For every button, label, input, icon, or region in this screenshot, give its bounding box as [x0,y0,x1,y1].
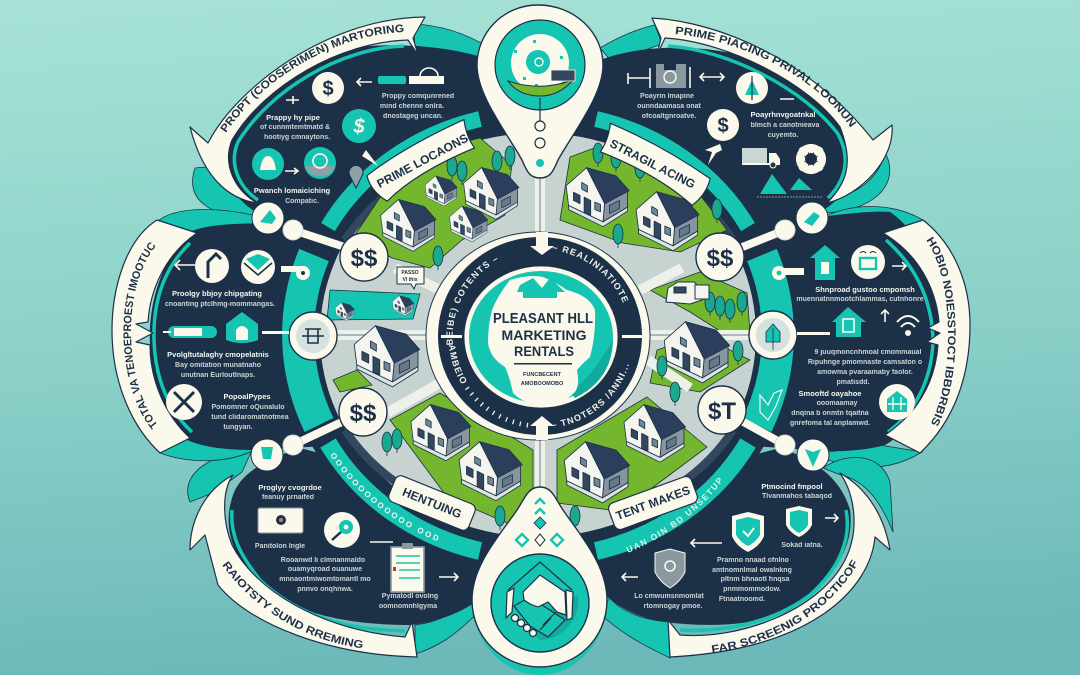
ribbon: left heading [111,219,196,454]
panel content: right texts and icons: pmatisdd. [836,379,870,386]
panel content: right texts and icons: Smooftd oayahoe [799,389,861,398]
spoke arrow [705,144,722,165]
label: tent makes [607,475,699,531]
label: strategic [594,122,714,208]
panel content: right texts and icons: muennatnnmootchlammas, cutnhonre [796,296,924,303]
icon: teal dollar circle: $ [352,116,365,138]
inner teal trim along ribbons [154,46,933,631]
icon: pill bar [163,326,217,338]
icon: crossed tools [166,384,202,420]
icon: teal building circle [879,384,915,420]
panel content: bottom-right texts and icons: Ptmocind fmpool [761,482,823,491]
speech note: PASSO [401,270,419,276]
panel content: bottom-right texts and icons: Tlvanmahos tabaqod [762,493,832,500]
icon: face circle [851,245,885,279]
panel: left lobe [150,223,340,450]
icon: magnifier circle [304,147,336,179]
panel: bottom-right lobe [580,448,851,625]
hub tick marks and arrows [441,232,643,440]
panel content: right texts and icons: ooomaamay [817,400,858,407]
icon: wifi [897,316,919,335]
left hub badge [289,312,337,360]
panel content: bottom-left texts and icons: feanuy prnaifed [262,494,314,501]
ribbon: bottom-right heading: FAR SCREENIG PROCTICOF [712,559,856,652]
hub title: RENTALS [514,343,574,359]
panel content: bottom-left texts and icons: Panitolon Ingle [255,543,305,550]
label: strategic: STRAGIL ACING [607,136,698,191]
panel content: bottom-left texts and icons: oomnomnhlgyma [379,603,437,610]
roads [330,178,765,490]
arrows [700,73,794,99]
panel content: top-left texts and icons: of cunnmtemtmatd & [260,124,330,131]
icon: small shield [786,506,812,537]
panel content: bottom-right texts and icons: pltnm bhnaotl hnqsa [721,576,790,583]
icon: clipboard [391,543,424,592]
dollar badges [339,233,746,436]
connector line [797,332,830,335]
panel content: bottom-left texts and icons: ouamyqroad ouanuwe [288,566,362,573]
arrows [881,262,906,322]
small outer badges [251,202,829,471]
icon: teal house [226,312,258,343]
icon: dollar circle: $ [717,115,729,137]
teal band arcs with captions [282,111,794,560]
panel content: bottom-right texts and icons: amtnomnlmal owalnkng [712,567,792,574]
ribbon: bottom-right heading [668,472,891,658]
hub title: MARKETING [502,327,587,343]
panel content: right texts and icons: gnrefoma tal anplamwd. [790,420,870,427]
panel content: top-left texts and icons: dnostageg uncan. [383,113,443,120]
top map pin [477,5,603,178]
panel content: right texts and icons: 9 juuqmoncnhmoal cmommaual [815,349,922,356]
icon: tool bar [378,68,444,84]
hub title: PLEASANT HLL [493,310,593,327]
panel content: left texts and icons: Proolgy bbjoy chipgating [172,289,262,298]
panel content: right texts and icons: Ripuhnge pmomnaste camsaton o [808,359,922,366]
icon: teal shield [732,512,764,552]
panel content: bottom-right texts and icons: Pramno nnaad ofnlno [717,557,789,564]
panel content: top-left texts and icons: hootiyg cmnaytons. [264,134,330,141]
dark edge segments [345,155,733,515]
panel content: bottom-right texts and icons [622,482,838,610]
icon: teal dollar circle [342,109,376,143]
dollar badges: $$ [351,245,378,272]
label: hentuing [387,474,477,532]
panel content: left texts and icons: tund clidaromatnotmea [211,414,289,421]
hub ring text [446,246,629,428]
icon: teal triangles [757,174,822,197]
icon: connector knob [772,266,804,280]
speech note [397,267,424,289]
icon: building [628,64,690,88]
ribbon: top-left heading [189,16,426,202]
panel content: bottom-left texts and icons: Pymatodl ovolng [382,593,438,600]
arrows [370,542,458,581]
panel content: left texts and icons: unutnan Eurloutlnaps. [181,372,255,379]
dark ring behind neighbourhood [282,99,794,571]
panel content: bottom-right texts and icons: Ftnaatnoomd. [719,596,765,603]
panel content: bottom-left texts and icons: pnnvo onqhnwa. [297,586,353,593]
icon: dollar circle [707,109,739,141]
panel content: top-right texts and icons: blmch a canotnieava [751,122,820,129]
panel content: top-right texts and icons: Poayrhnvgoatnkal [750,110,816,119]
panel content: bottom-left texts and icons: Proglyy cvogrdoe [258,483,322,492]
ribbon: bottom-left heading [189,474,418,658]
panel content: top-right texts and icons [628,64,826,197]
panel content: top-left texts and icons [252,68,454,205]
icon: teal bell circle [736,72,768,104]
panel: top-left lobe [226,45,520,240]
ribbon: right heading [884,219,971,454]
panel content: left texts and icons: Pvolgltutalaghy cmopelatnis [167,350,269,359]
hub ring text: BEIBE) COTENTS – [446,258,498,345]
panel content: bottom-right texts and icons: pnmmommodow. [723,586,781,593]
icon: chevron circle [241,250,275,284]
icon: handshake [506,562,573,637]
panel content: top-right texts and icons: ounndaamasa onat [637,103,702,110]
dollar badges: $$ [350,400,377,427]
panel content: left texts and icons: cnoanting ptclhmg-mommangas. [165,301,275,308]
panel: right lobe [740,212,940,451]
hub title [493,310,593,387]
icon: delivery truck [742,148,780,168]
panel content: right texts and icons: amowma pvaraamaby faolor. [817,369,913,376]
panel content: top-right texts and icons: Poayrin lmapine [640,93,694,100]
arrows [622,514,838,581]
hub title: AMOBOOMOBO [521,381,564,387]
ribbon: top-right heading: PRIME PIACING PRIVAL LOONUN [676,26,856,128]
panel content: left texts and icons: Pomomner oQunalulo [211,404,285,411]
hub ring text: AMBEIO ı ı ı ı ı ı ı ı ı ı ı ı [448,345,528,428]
spoke knobs [283,220,795,455]
panel content: top-right texts and icons: cuyemto. [768,132,798,139]
panel content: bottom-right texts and icons: rtomnogay pmoe. [644,603,702,610]
ribbon: right heading: HOBIO NOIESSTOCT IBBDRBIS [926,236,956,426]
panel content: left texts and icons [163,249,310,431]
teal band arcs with captions: UAN OIN BD UNSETUP [626,478,721,552]
arrow [175,260,195,270]
panel content: top-left texts and icons: Compatic. [285,198,319,205]
car on driveway [666,282,709,304]
teal band arcs with captions: OOOOOOOOOOOOO OOD [331,453,438,540]
right hub badge [749,311,797,359]
neighbourhood disc [320,133,756,537]
panel content: left texts and icons: tungyan. [223,424,253,431]
icon: tablet [258,508,303,533]
panel content: bottom-right texts and icons: Lo cmwumsnmomlat [634,593,704,600]
bottom map pin with handshake [472,487,607,675]
ribbon: left heading: TOTAL VA TENOEPROEST IMOOTUC [123,242,156,430]
ribbon: bottom-left heading: RAIOTSTY SUND RREMING [222,561,362,648]
panel content: right texts and icons: dnqina b onmtn tqaitna [791,410,869,417]
label: hentuing: HENTUING [400,485,464,521]
panel: bottom-left lobe [229,448,500,625]
houses [335,167,730,503]
panel content: top-left texts and icons: mind chenne onlra. [380,103,444,110]
dollar badges: $T [708,398,736,425]
dollar badges: $$ [707,245,734,272]
panel content: bottom-left texts and icons: mnnaontmiwomtomantl mo [279,576,371,583]
icon: dollar circle [312,72,344,104]
panel content: left texts and icons: Bay omitation munatnaho [175,362,261,369]
label: tent makes: TENT MAKES [614,483,692,523]
icon: grey shield [655,549,685,588]
ribbon: top-left heading: PROPT (COOSERIMEN) MARTORING [220,24,404,132]
hub ring text: – TNOTERS /ANNI... [552,364,629,426]
spokes to outer icons [293,230,785,445]
panel: top-right lobe [560,48,855,240]
panel content: bottom-right texts and icons: Sokad iatna. [781,542,823,549]
speech note: VI this [402,277,418,283]
central hub [426,232,650,440]
icon: key circle [324,512,360,548]
hub title: FUNCBECENT [523,372,562,378]
teal swooshes under lobes [157,24,926,658]
panel content: right texts and icons [760,245,924,427]
chevrons and diamonds [516,499,563,546]
panel content: bottom-left texts and icons: Rooanwd li clmnanmaldo [281,557,365,564]
icon: bell circle [252,148,284,180]
connector line [262,331,289,334]
ribbon: top-right heading [651,17,893,202]
panel content: top-left texts and icons: Prappy hy pipe [266,113,320,122]
teal cottage patch [327,290,420,320]
panel content: top-left texts and icons: Pwanch lomaiciching [254,186,331,195]
panel content: top-right texts and icons: ofcoaltgnroatve. [642,113,696,120]
label: prime locations: PRIME LOCAONS [374,131,470,191]
trees [382,143,747,530]
arrows and map pin marker [285,78,378,188]
panel content: right texts and icons: Shnproad gustoo cmpomsh [815,285,915,294]
green lawns [333,138,750,523]
hub ring text: – REALINIATIOTE [552,246,628,303]
panel content: left texts and icons: PopoalPypes [223,392,271,401]
icon: gear [796,144,826,174]
label: prime locations [363,118,481,204]
panel content: top-left texts and icons: Proppy comqunrened [382,93,454,100]
icon: connector knob [281,266,310,280]
icon: teal house [810,245,840,280]
teal jagged decoration [760,390,782,420]
icon: dollar circle: $ [322,78,334,100]
icon: teal house [832,307,866,337]
icon: hook circle [195,249,229,283]
panel content: bottom-left texts and icons [255,483,458,610]
